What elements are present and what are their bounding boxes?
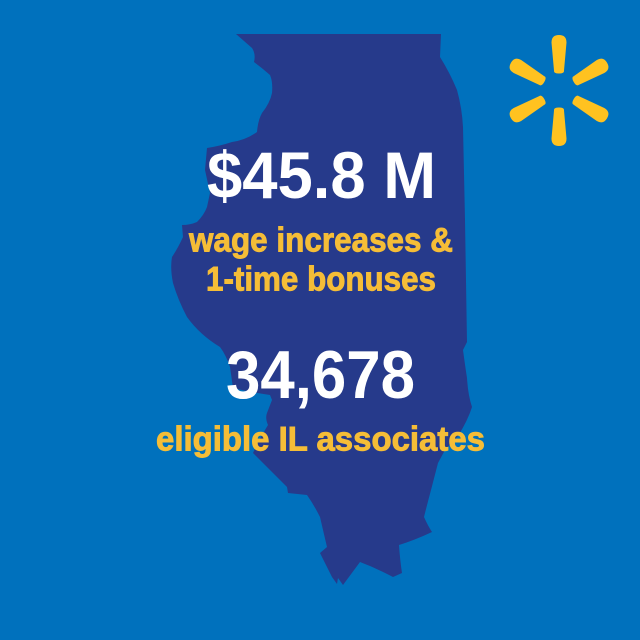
stat: wage amount: $45.8 M [207, 138, 436, 212]
icon: Walmart spark logo [507, 35, 611, 146]
label: eligible associates: eligible IL associates [156, 420, 485, 458]
label: bonuses line: 1-time bonuses [206, 260, 436, 298]
label: wage increases line: wage increases & [188, 222, 453, 260]
stat: associate count: 34,678 [226, 337, 415, 413]
map: Illinois silhouette [171, 34, 472, 585]
